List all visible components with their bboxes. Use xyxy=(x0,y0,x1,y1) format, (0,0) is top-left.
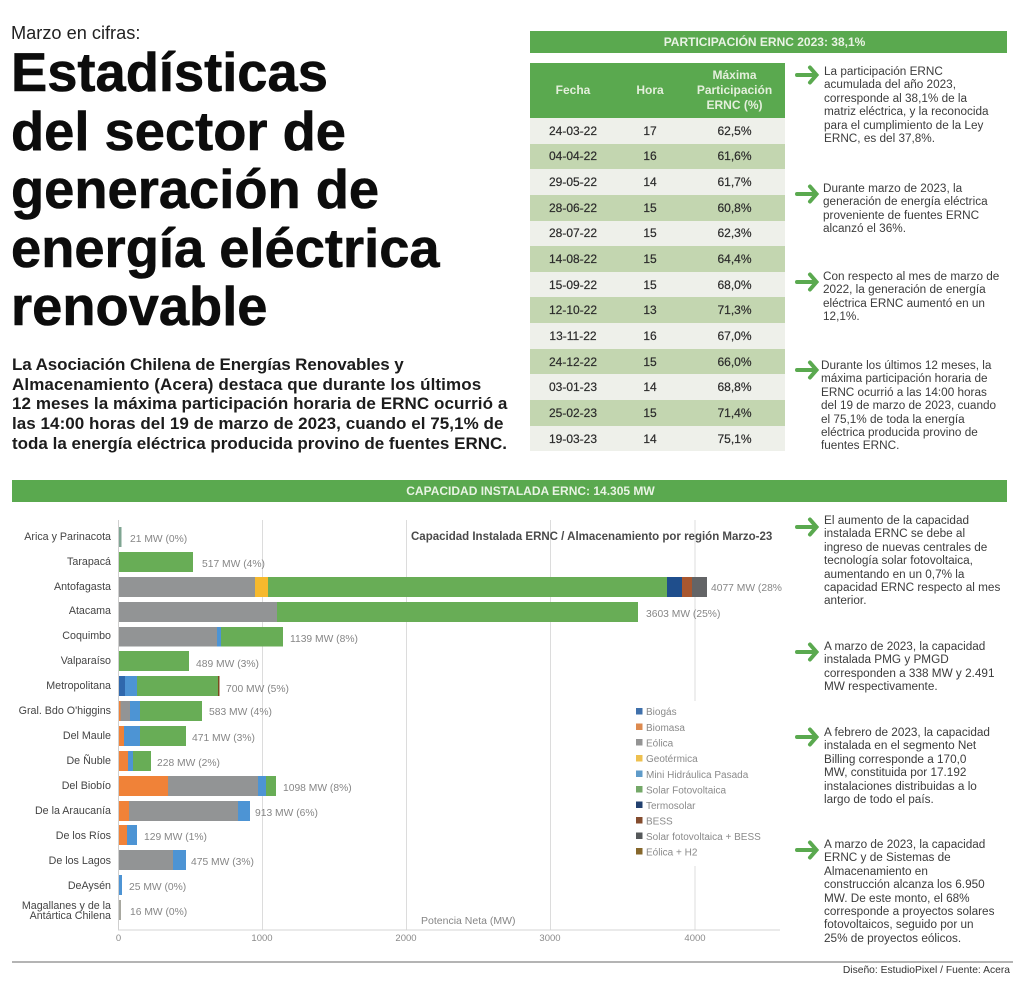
table: máxima participación: 64,4% xyxy=(717,252,752,266)
table: máxima participación: 28-06-22 xyxy=(549,201,597,215)
note 8: 25% de proyectos eólicos. xyxy=(824,932,961,945)
region labels: De Ñuble xyxy=(66,754,111,767)
table: máxima participación: 15 xyxy=(643,278,657,292)
kicker: Marzo en cifras: xyxy=(11,23,140,43)
note 7: Billing corresponde a 170,0 xyxy=(824,753,966,766)
table: máxima participación: 29-05-22 xyxy=(549,175,597,189)
stacked bars xyxy=(119,527,707,920)
legend: Geotérmica xyxy=(646,754,698,765)
region labels: DeAysén xyxy=(68,880,111,892)
note 4 xyxy=(821,359,996,452)
axis ticks: 4000 xyxy=(684,933,706,944)
note 4: el 75,1% de toda la energía xyxy=(821,413,965,426)
table: máxima participación: 04-04-22 xyxy=(549,149,597,163)
table: máxima participación: 19-03-23 xyxy=(549,432,597,446)
credits: Diseño: EstudioPixel / Fuente: Acera xyxy=(843,965,1010,976)
note 4: Durante los últimos 12 meses, la xyxy=(821,359,991,372)
arrow 7 xyxy=(795,727,819,747)
title: energía eléctrica xyxy=(11,218,440,279)
region labels: Atacama xyxy=(69,605,111,617)
axis ticks: 1000 xyxy=(251,933,273,944)
table: máxima participación: 25-02-23 xyxy=(549,406,597,420)
arrow 3 xyxy=(795,272,819,292)
table: máxima participación: 14 xyxy=(643,175,657,189)
table: máxima participación: 28-07-22 xyxy=(549,226,597,240)
axis ticks xyxy=(116,933,706,944)
value labels: 489 MW (3%) xyxy=(196,659,259,670)
table: máxima participación: 15 xyxy=(643,252,657,266)
note 8: MW. De este monto, el 68% xyxy=(824,892,970,905)
table: máxima participación: 03-01-23 xyxy=(549,380,597,394)
legend: BESS xyxy=(646,816,673,828)
region labels: De los Lagos xyxy=(49,855,111,867)
table: máxima participación: ERNC (%) xyxy=(706,98,762,112)
table: máxima participación: 68,0% xyxy=(717,278,752,292)
note 6 xyxy=(824,640,994,693)
note 6: instalada PMG y PMGD xyxy=(824,653,949,666)
table: máxima participación xyxy=(530,63,785,451)
note 4: fuentes ERNC. xyxy=(821,439,899,452)
note 7 xyxy=(824,726,990,806)
value labels: 700 MW (5%) xyxy=(226,684,289,695)
region labels: Coquimbo xyxy=(62,630,111,642)
note 1 xyxy=(824,65,989,145)
table: máxima participación: 14-08-22 xyxy=(549,252,597,266)
legend: Eólica + H2 xyxy=(646,848,698,858)
legend: Termosolar xyxy=(646,801,696,812)
table: máxima participación: 15 xyxy=(643,355,657,369)
note 6: corresponden a 338 MW y 2.491 xyxy=(824,667,994,680)
value labels: 228 MW (2%) xyxy=(157,758,220,769)
note 1: corresponde al 38,1% de la xyxy=(824,92,967,105)
note 5: ingreso de nuevas centrales de xyxy=(824,541,987,554)
note 1: matriz eléctrica, y la reconocida xyxy=(824,105,989,118)
note 4: eléctrica producida provino de xyxy=(821,426,978,439)
table: máxima participación: Fecha xyxy=(556,83,590,97)
value labels xyxy=(129,534,782,918)
value labels: 517 MW (4%) xyxy=(202,559,265,570)
note 5: El aumento de la capacidad xyxy=(824,514,969,527)
value labels: 3603 MW (25%) xyxy=(646,609,720,620)
value labels: 913 MW (6%) xyxy=(255,808,318,819)
axis title: Potencia Neta (MW) xyxy=(421,915,516,927)
table: máxima participación: Hora xyxy=(636,83,664,97)
note 7: instalaciones distribuidas a lo xyxy=(824,780,977,793)
note 2: alcanzó el 36%. xyxy=(823,222,906,235)
note 7: A febrero de 2023, la capacidad xyxy=(824,726,990,739)
note 1: para el cumplimiento de la Ley xyxy=(824,119,983,132)
arrow 1 xyxy=(795,65,819,85)
table: máxima participación: 12-10-22 xyxy=(549,303,597,317)
region labels: Valparaíso xyxy=(61,655,111,667)
value labels: 1139 MW (8%) xyxy=(290,634,358,645)
intro text xyxy=(12,355,508,453)
table: máxima participación: 61,7% xyxy=(717,175,752,189)
region labels: Del Maule xyxy=(63,730,111,742)
arrow 2 xyxy=(795,184,819,204)
note 6: A marzo de 2023, la capacidad xyxy=(824,640,985,653)
table: máxima participación: 68,8% xyxy=(717,380,752,394)
table: máxima participación: 15 xyxy=(643,406,657,420)
table: máxima participación: 66,0% xyxy=(717,355,752,369)
legend: Eólica xyxy=(646,738,674,750)
region labels xyxy=(19,531,111,922)
title xyxy=(11,42,440,337)
note 2 xyxy=(823,182,988,235)
table: máxima participación: 62,5% xyxy=(717,124,752,138)
note 4: del 19 de marzo de 2023, cuando xyxy=(821,399,996,412)
note 7: MW, constituida por 17.192 xyxy=(824,766,966,779)
note 2: proveniente de fuentes ERNC xyxy=(823,209,979,222)
note 3: eléctrica ERNC aumentó en un xyxy=(823,297,985,310)
arrow 8 xyxy=(795,840,819,860)
table: máxima participación: 61,6% xyxy=(717,149,752,163)
axis ticks: 0 xyxy=(116,933,121,944)
table: máxima participación: 75,1% xyxy=(717,432,752,446)
note 8: ERNC y de Sistemas de xyxy=(824,851,951,864)
note 7: instalada en el segmento Net xyxy=(824,739,976,752)
note 6: MW respectivamente. xyxy=(824,680,938,693)
table: máxima participación: 15 xyxy=(643,226,657,240)
axis ticks: 3000 xyxy=(539,933,561,944)
table: máxima participación: Máxima xyxy=(712,68,757,82)
note 7: largo de todo el país. xyxy=(824,793,934,806)
heading band: participación xyxy=(530,31,1007,53)
legend: Solar Fotovoltaica xyxy=(646,786,726,796)
note 1: ERNC, es del 37,8%. xyxy=(824,132,935,145)
table: máxima participación: 24-03-22 xyxy=(549,124,597,138)
table: máxima participación: 71,3% xyxy=(717,303,752,317)
note 3: 2022, la generación de energía xyxy=(823,283,986,296)
legend xyxy=(630,701,761,866)
table: máxima participación: 15 xyxy=(643,201,657,215)
note 5: tecnología solar fotovoltaica, xyxy=(824,554,973,567)
value labels: 21 MW (0%) xyxy=(130,534,187,545)
chart title: Capacidad Instalada ERNC / Almacenamiento por región Marzo-23 xyxy=(411,531,772,543)
region labels: Arica y Parinacota xyxy=(24,531,111,543)
table: máxima participación: 62,3% xyxy=(717,226,752,240)
intro text: toda la energía eléctrica producida provino de fuentes ERNC. xyxy=(12,434,507,453)
table: máxima participación: 14 xyxy=(643,380,657,394)
note 1: La participación ERNC xyxy=(824,65,943,78)
title: Estadísticas xyxy=(11,42,328,103)
note 4: ERNC ocurrió a las 14:00 horas xyxy=(821,386,987,399)
region labels: Antofagasta xyxy=(54,581,111,593)
axis ticks: 2000 xyxy=(395,933,417,944)
note 3: Con respecto al mes de marzo de xyxy=(823,270,999,283)
note 4: máxima participación horaria de xyxy=(821,372,988,385)
note 8 xyxy=(824,838,994,945)
table: máxima participación: Participación xyxy=(697,83,772,97)
note 2: Durante marzo de 2023, la xyxy=(823,182,962,195)
note 5: aumentando en un 0,7% la xyxy=(824,568,964,581)
note 5: capacidad ERNC respecto al mes xyxy=(824,581,1000,594)
note 8: A marzo de 2023, la capacidad xyxy=(824,838,985,851)
intro text: las 14:00 horas del 19 de marzo de 2023, cuando el 75,1% de xyxy=(12,414,503,433)
value labels: 471 MW (3%) xyxy=(192,733,255,744)
region labels: Gral. Bdo O'higgins xyxy=(19,705,111,717)
region labels: De la Araucanía xyxy=(35,805,111,817)
table: máxima participación: 71,4% xyxy=(717,406,752,420)
note 5: instalada ERNC se debe al xyxy=(824,527,965,540)
heading band: capacidad instalada xyxy=(12,480,1007,502)
region labels: Tarapacá xyxy=(67,556,111,568)
value labels: 1098 MW (8%) xyxy=(283,783,352,794)
value labels: 16 MW (0%) xyxy=(130,907,187,918)
title: del sector de xyxy=(11,101,346,162)
arrow 6 xyxy=(795,642,819,662)
table: máxima participación: 15-09-22 xyxy=(549,278,597,292)
table: máxima participación: 17 xyxy=(643,124,657,138)
title: generación de xyxy=(11,159,379,220)
value labels: 583 MW (4%) xyxy=(209,707,272,718)
note 8: construcción alcanza los 6.950 xyxy=(824,878,985,891)
value labels: 129 MW (1%) xyxy=(144,832,207,843)
region labels: Del Biobío xyxy=(62,780,111,792)
note 8: corresponde a proyectos solares xyxy=(824,905,994,918)
note 8: fotovoltaicos, seguido por un xyxy=(824,918,974,931)
title: renovable xyxy=(11,276,268,337)
value labels: 475 MW (3%) xyxy=(191,857,254,868)
table: máxima participación: 24-12-22 xyxy=(549,355,597,369)
value labels: 25 MW (0%) xyxy=(129,882,186,893)
note 1: acumulada del año 2023, xyxy=(824,78,956,91)
note 2: generación de energía eléctrica xyxy=(823,195,988,208)
note 8: Almacenamiento en xyxy=(824,865,928,878)
heading band: participación: PARTICIPACIÓN ERNC 2023: 38,1% xyxy=(664,35,865,49)
intro text: 12 meses la máxima participación horaria de ERNC ocurrió a xyxy=(12,394,507,413)
value labels: 4077 MW (28% xyxy=(711,583,782,594)
intro text: La Asociación Chilena de Energías Renovables y xyxy=(12,355,404,374)
legend: Solar fotovoltaica + BESS xyxy=(646,832,761,843)
table: máxima participación: 14 xyxy=(643,432,657,446)
note 3: 12,1%. xyxy=(823,310,860,323)
legend: Biogás xyxy=(646,707,677,718)
region labels: De los Ríos xyxy=(56,830,111,842)
table: máxima participación: 13-11-22 xyxy=(549,329,597,343)
table: máxima participación: 60,8% xyxy=(717,201,752,215)
region labels: Antártica Chilena xyxy=(30,910,111,922)
arrow 5 xyxy=(795,517,819,537)
table: máxima participación: 13 xyxy=(643,303,657,317)
note 5 xyxy=(824,514,1000,607)
intro text: Almacenamiento (Acera) destaca que durante los últimos xyxy=(12,375,481,394)
arrow 4 xyxy=(795,360,819,380)
region labels: Metropolitana xyxy=(46,680,111,692)
chart: capacidad instalada por región xyxy=(19,520,782,944)
table: máxima participación: 67,0% xyxy=(717,329,752,343)
region labels: Magallanes y de la xyxy=(22,900,111,912)
note 5: anterior. xyxy=(824,594,866,607)
note 3 xyxy=(823,270,999,323)
table: máxima participación: 16 xyxy=(643,149,657,163)
legend: Biomasa xyxy=(646,723,685,734)
table: máxima participación: 16 xyxy=(643,329,657,343)
legend: Mini Hidráulica Pasada xyxy=(646,770,749,781)
heading band: capacidad instalada: CAPACIDAD INSTALADA ERNC: 14.305 MW xyxy=(406,484,655,498)
